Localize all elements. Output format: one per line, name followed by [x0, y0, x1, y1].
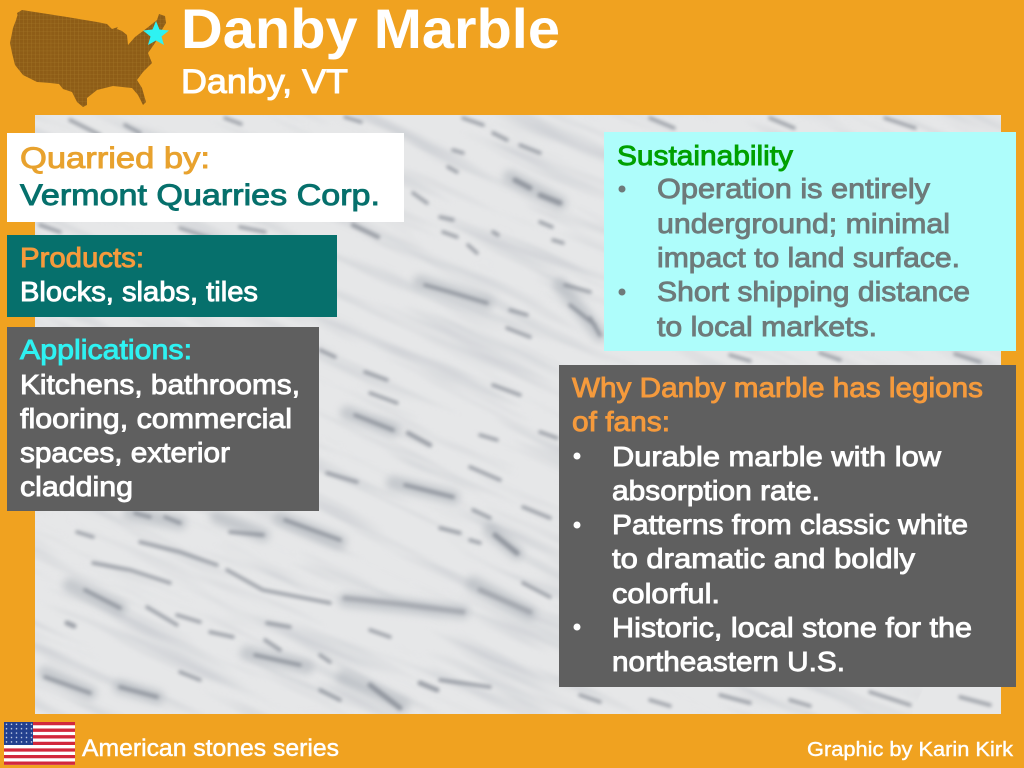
panel: applications: flooring, commercial [20, 403, 292, 434]
panel: quarried by: Vermont Quarries Corp. [20, 179, 380, 212]
panel: applications: spaces, exterior [20, 437, 230, 468]
panel: sustainability: to local markets. [657, 311, 877, 342]
panel: why Danby marble has legions of fans: of fans: [572, 406, 670, 437]
panel: sustainability: Operation is entirely [657, 173, 930, 204]
panel: sustainability [604, 132, 1016, 351]
panel: quarried by [7, 133, 404, 222]
marble photo panel [35, 115, 1001, 714]
panel: applications: Applications: [20, 334, 192, 365]
panel: products: Blocks, slabs, tiles [20, 276, 258, 307]
subtitle: Danby, VT [181, 63, 348, 101]
panel: why Danby marble has legions of fans: Durable marble with low [612, 441, 942, 472]
panel: sustainability: underground; minimal [657, 208, 950, 239]
icon: American flag [4, 722, 75, 765]
panel: products: Products: [20, 242, 144, 273]
panel: why Danby marble has legions of fans: Why Danby marble has legions [572, 372, 983, 403]
icon: location star [143, 21, 169, 45]
panel: quarried by: Quarried by: [20, 142, 210, 175]
panel: applications: cladding [20, 471, 133, 502]
panel: why Danby marble has legions of fans: colorful. [612, 578, 720, 609]
panel: sustainability: Short shipping distance [657, 276, 970, 307]
footer: credit: Graphic by Karin Kirk [807, 739, 1014, 761]
panel: why Danby marble has legions of fans: to dramatic and boldly [612, 543, 915, 574]
panel: sustainability: Sustainability [617, 140, 793, 171]
panel: sustainability: impact to land surface. [657, 242, 960, 273]
icon: US map with crosshatch [10, 10, 166, 107]
panel: products [7, 235, 337, 317]
footer: series label: American stones series [82, 735, 339, 762]
panel: applications [7, 327, 319, 511]
panel: applications: Kitchens, bathrooms, [20, 369, 300, 400]
panel: why Danby marble has legions of fans: northeastern U.S. [612, 646, 845, 677]
panel: why Danby marble has legions of fans: absorption rate. [612, 475, 820, 506]
panel: why Danby marble has legions of fans [559, 365, 1016, 687]
panel: why Danby marble has legions of fans: Patterns from classic white [612, 509, 968, 540]
panel: why Danby marble has legions of fans: Historic, local stone for the [612, 612, 972, 643]
